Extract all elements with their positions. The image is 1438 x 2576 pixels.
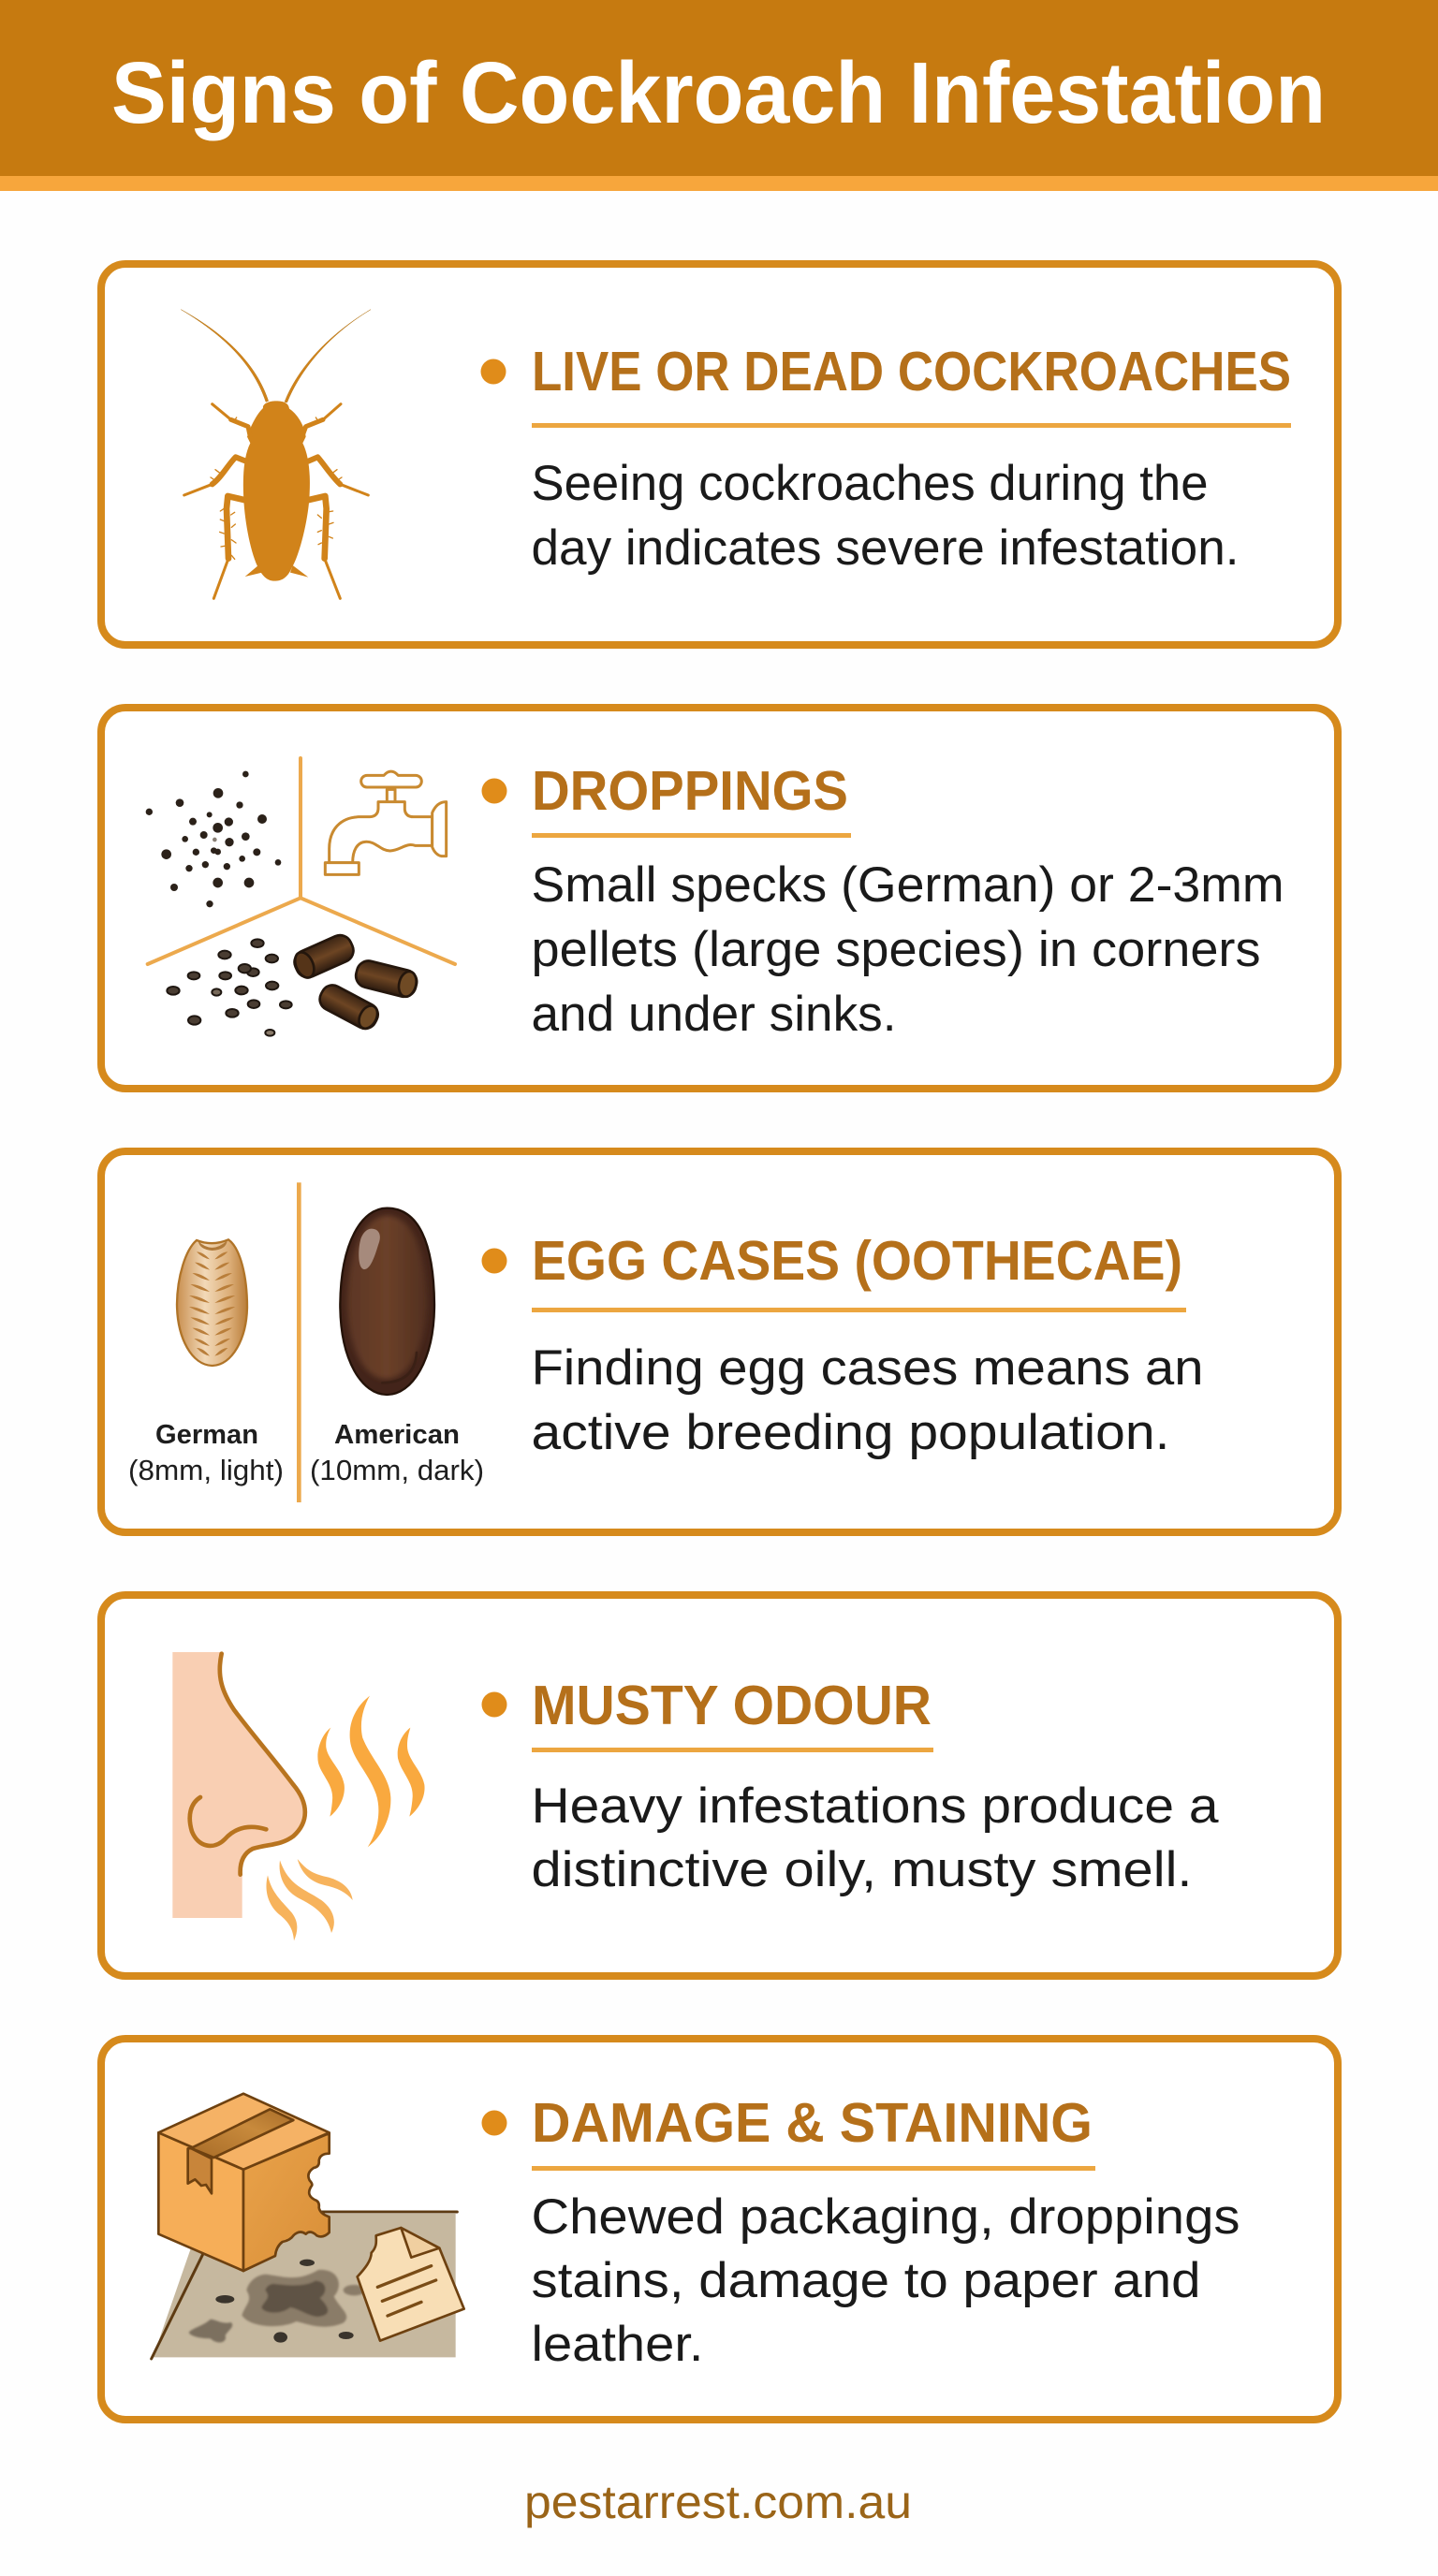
bullet (481, 779, 507, 803)
heading: MUSTY ODOUR (532, 1675, 932, 1736)
bullet (481, 359, 506, 384)
heading: DROPPINGS (532, 760, 848, 822)
chewed cardboard box (158, 2094, 330, 2271)
label: American: American (334, 1420, 460, 1450)
label: German size: (8mm, light) (128, 1454, 284, 1486)
small oval droppings (167, 939, 292, 1036)
description: Chewed packaging, droppings (532, 2189, 1240, 2245)
description: day indicates severe infestation. (532, 520, 1240, 576)
description: leather. (532, 2317, 704, 2372)
description: Small specks (German) or 2-3mm (532, 857, 1284, 913)
panel: egg cases (101, 1151, 1338, 1532)
description: Finding egg cases means an (532, 1340, 1204, 1396)
icon: droppings in corner with tap (146, 758, 455, 1036)
panel: damage and staining (101, 2039, 1338, 2420)
odour wisps (266, 1696, 425, 1940)
heading underline (532, 423, 1291, 428)
label: German: German (155, 1420, 258, 1450)
icon: cockroach silhouette (181, 310, 371, 598)
description: and under sinks. (532, 987, 897, 1042)
description: distinctive oily, musty smell. (532, 1842, 1193, 1897)
icon: chewed box, stains and paper (152, 2094, 464, 2359)
stained floor (153, 2214, 456, 2357)
bullet (481, 1249, 507, 1273)
heading: DAMAGE & STAINING (532, 2092, 1093, 2154)
title: Signs of Cockroach Infestation (111, 44, 1326, 141)
panel: musty odour (101, 1595, 1338, 1976)
heading underline (532, 833, 851, 838)
heading underline (532, 1748, 933, 1752)
description: Seeing cockroaches during the (532, 456, 1208, 511)
label: American size: (10mm, dark) (310, 1454, 484, 1486)
heading: EGG CASES (OOTHECAE) (532, 1230, 1182, 1292)
description: stains, damage to paper and (532, 2253, 1200, 2308)
heading underline (532, 2166, 1095, 2171)
corner lines (148, 758, 455, 964)
bullet (481, 1692, 507, 1717)
description: Heavy infestations produce a (532, 1778, 1219, 1834)
panel: droppings (101, 708, 1338, 1089)
chewed paper (358, 2228, 464, 2341)
nose skin (172, 1652, 305, 1918)
large pellets (290, 931, 419, 1032)
nose outline (190, 1654, 305, 1875)
panel: live or dead cockroaches (101, 264, 1338, 645)
icon: nose with odour wisps (172, 1652, 425, 1940)
heading: LIVE OR DEAD COCKROACHES (532, 341, 1291, 402)
icon: egg cases comparison (177, 1182, 434, 1502)
stains (189, 2270, 365, 2342)
german egg case (177, 1239, 247, 1366)
bullet (481, 2110, 507, 2136)
footer website: pestarrest.com.au (524, 2476, 912, 2528)
tap (325, 771, 447, 874)
american egg case (340, 1208, 434, 1395)
small specks (146, 771, 281, 907)
description: active breeding population. (532, 1405, 1170, 1460)
header banner (0, 0, 1438, 191)
description: pellets (large species) in corners (532, 922, 1260, 977)
heading underline (532, 1308, 1186, 1312)
